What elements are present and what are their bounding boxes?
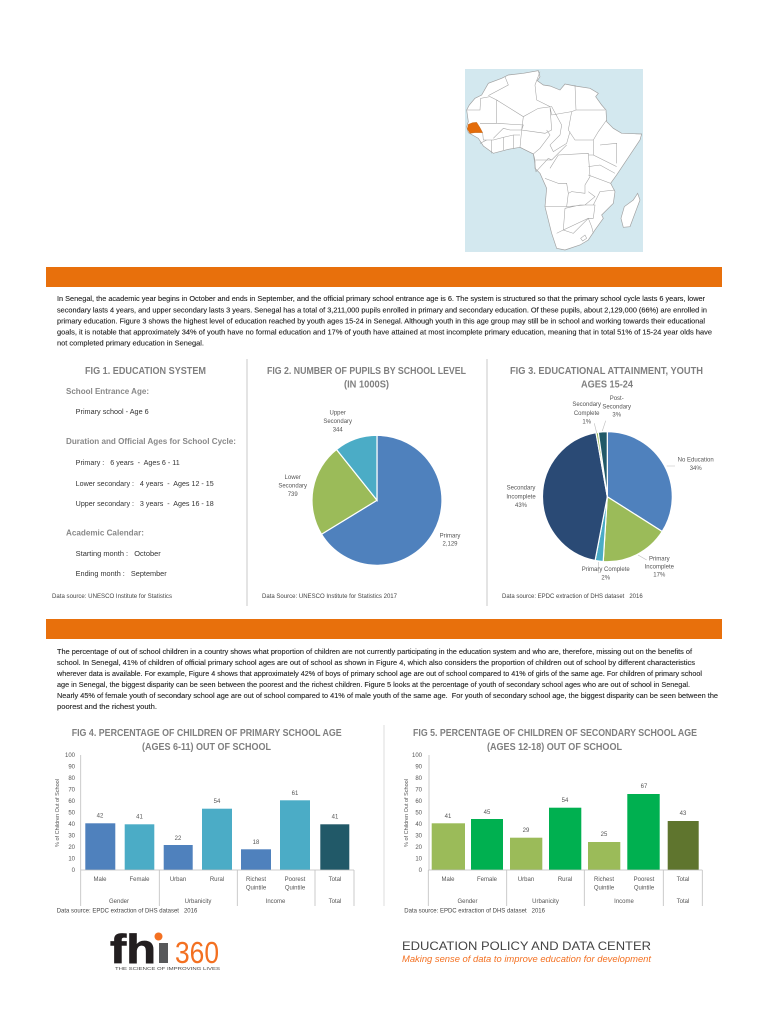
- y axis labels: 0: [72, 868, 76, 874]
- logo: fhi360: 360: [175, 935, 219, 970]
- category labels: Income: [614, 899, 634, 905]
- value labels: 41: [445, 814, 452, 820]
- paragraph: education system intro: goals, it is notable that approximately 34% of youth have no formal education and 17% of youth have attained at most incomplete primary education, meaning that in total 51% of 15-24 year olds have: [57, 330, 712, 336]
- y axis labels: 90: [68, 764, 76, 770]
- pie labels: Secondary: [507, 486, 535, 492]
- value labels: 45: [484, 810, 491, 816]
- ending month: Ending month : September: [76, 571, 167, 578]
- value labels: 18: [253, 840, 260, 846]
- axes and group separators: [428, 755, 702, 906]
- bars: [432, 794, 699, 870]
- subheading: academic calendar: Academic Calendar:: [66, 528, 144, 538]
- category labels: Total: [677, 877, 689, 883]
- heading: Fig 2: FIG 2. NUMBER OF PUPILS BY SCHOOL LEVEL: [267, 366, 466, 377]
- y axis labels: 80: [415, 776, 423, 782]
- category labels: Quintile: [246, 886, 267, 892]
- category labels: [93, 877, 341, 905]
- category labels: Urban: [518, 877, 534, 883]
- upper secondary cycle: Upper secondary : 3 years - Ages 16 - 18: [76, 501, 214, 508]
- value labels: 61: [292, 791, 299, 797]
- value labels: [97, 791, 339, 846]
- pie labels: 2%: [601, 576, 611, 582]
- paragraph: out of school intro: Nearly 45% of female youth of secondary school age are out of school compared to 41% of male youth of the same age. For youth of secondary school age, the biggest disparity can be seen between the: [57, 693, 718, 700]
- pie labels: 3%: [612, 413, 622, 419]
- y axis labels: 50: [415, 810, 423, 816]
- y axis labels: 60: [415, 799, 423, 805]
- map: Africa with Senegal highlighted: [465, 69, 643, 252]
- pie labels: Primary: [649, 556, 670, 562]
- pie labels: Secondary: [572, 402, 601, 408]
- heading: Fig 5: FIG 5. PERCENTAGE OF CHILDREN OF SECONDARY SCHOOL AGE: [413, 728, 697, 739]
- y axis labels: [65, 753, 76, 874]
- value labels: 54: [214, 799, 221, 805]
- heading: Fig 3: AGES 15-24: [581, 380, 633, 390]
- value labels: 25: [601, 832, 608, 838]
- panel: Fig 4 bar chart: [55, 728, 354, 914]
- pie labels: Complete: [574, 411, 600, 417]
- category labels: Quintile: [594, 886, 615, 892]
- y axis labels: [412, 753, 423, 874]
- panel: Fig 1 education system: [52, 366, 236, 600]
- y axis labels: 20: [68, 845, 76, 851]
- pie labels: Incomplete: [506, 494, 536, 500]
- pie labels: Secondary: [278, 484, 307, 490]
- y axis labels: 70: [415, 788, 423, 794]
- pie labels: Primary Complete: [582, 567, 630, 573]
- category labels: Rural: [210, 877, 224, 883]
- category labels: Gender: [109, 899, 129, 905]
- category labels: [441, 877, 689, 905]
- category labels: Urban: [170, 877, 186, 883]
- value labels: 29: [523, 828, 530, 834]
- paragraph: out of school intro: age in Senegal, the biggest disparity can be seen between the poorest and the richest children. Figure 5 looks at the percentage of youth of secondary school ages who are out of school in Senegal.: [57, 682, 690, 689]
- paragraph: education system intro: primary education. Figure 3 shows the highest level of education reached by youth ages 15-24 in Senegal. Although youth in this age group may still be in school and working towards their educational: [57, 318, 705, 326]
- category labels: Poorest: [634, 877, 655, 883]
- value labels: 42: [97, 814, 104, 820]
- heading: Fig 4: [72, 728, 342, 753]
- paragraph: out of school intro: school. In Senegal, 41% of children of official primary school ages are out of school as shown in Figure 4, which also considers the proportion of children out of school by different characteristics: [57, 660, 696, 667]
- category labels: Total: [329, 877, 341, 883]
- category labels: Rural: [558, 877, 572, 883]
- y axis labels: 20: [415, 845, 423, 851]
- section banner 2: [46, 619, 722, 639]
- paragraph: out of school intro: The percentage of out of school children in a country shows what proportion of children are not currently participating in the education system and who are, therefore, missing out on the benefits of: [57, 649, 692, 656]
- pie labels: [278, 410, 460, 548]
- y axis labels: 30: [415, 834, 423, 840]
- primary cycle: Primary : 6 years - Ages 6 - 11: [76, 460, 180, 467]
- logo: Education Policy and Data Center: Making sense of data to improve education for development: [402, 954, 652, 964]
- category labels: Quintile: [285, 886, 306, 892]
- category labels: Richest: [246, 877, 266, 883]
- pie labels: [506, 396, 714, 582]
- category labels: Total: [677, 899, 689, 905]
- panel: Fig 5 bar chart: [404, 728, 702, 914]
- y axis labels: 40: [415, 822, 423, 828]
- logo: Education Policy and Data Center: EDUCATION POLICY AND DATA CENTER: [402, 941, 651, 953]
- pie labels: 17%: [653, 573, 666, 579]
- paragraph: education system intro: In Senegal, the academic year begins in October and ends in September, and the official primary school entrance age is 6. The system is structured so that the primary school cycle lasts 6 years, lower: [57, 296, 706, 303]
- pie labels: 1%: [582, 419, 592, 425]
- starting month: Starting month : October: [76, 551, 161, 558]
- entrance age value: Primary school - Age 6: [76, 409, 149, 416]
- paragraph: out of school intro: wherever data is available. For example, Figure 4 shows that approximately 42% of boys of primary school age are out of school compared to 41% of girls of the same age. For children of primary school: [56, 671, 702, 678]
- category labels: Gender: [457, 899, 478, 905]
- category labels: Poorest: [285, 877, 306, 883]
- y axis labels: 40: [68, 822, 76, 828]
- y axis labels: 90: [415, 764, 423, 770]
- y axis labels: 60: [68, 799, 76, 805]
- value labels: 41: [136, 814, 143, 820]
- paragraph: out of school intro: [56, 649, 718, 711]
- value labels: 67: [641, 784, 648, 790]
- category labels: Richest: [594, 877, 614, 883]
- category labels: Female: [477, 877, 498, 883]
- y axis labels: 50: [68, 810, 76, 816]
- y axis labels: 10: [68, 856, 76, 862]
- pie labels: 2,129: [442, 542, 458, 548]
- heading: Fig 2: [267, 366, 466, 390]
- pie labels: No Education: [678, 458, 714, 464]
- leader lines: [594, 421, 675, 573]
- pie: pupils by level: [312, 435, 442, 565]
- heading: Fig 3: [510, 366, 703, 390]
- value labels: 54: [562, 798, 569, 804]
- subheading: duration: Duration and Official Ages for School Cycle:: [66, 436, 236, 446]
- data source: Data source: UNESCO Institute for Statistics: [52, 594, 172, 600]
- pie labels: Post-: [610, 396, 624, 402]
- data source: Data source: EPDC extraction of DHS dataset 2016: [404, 908, 546, 914]
- data source: Data source: EPDC extraction of DHS dataset 2016: [57, 908, 198, 914]
- value labels: 22: [175, 836, 182, 842]
- pie labels: Primary: [440, 534, 460, 540]
- y axis labels: 10: [415, 856, 423, 862]
- value labels: 43: [680, 811, 687, 817]
- lower secondary cycle: Lower secondary : 4 years - Ages 12 - 15: [76, 481, 214, 488]
- pie labels: 344: [333, 428, 343, 434]
- panel: Fig 3 pie chart: [502, 366, 714, 600]
- paragraph: out of school intro: poorest and the richest youth.: [57, 704, 157, 711]
- pie labels: Upper: [330, 410, 346, 416]
- category labels: Urbanicity: [185, 899, 211, 905]
- paragraph: education system intro: secondary lasts 4 years, and upper secondary lasts 3 years. Senegal has a total of 3,211,000 pupils enrolled in primary and secondary education. Of these pupils, about 2,129,000 (66%) are enrolled in: [57, 308, 707, 314]
- axes and group separators: [81, 755, 354, 906]
- pie labels: Incomplete: [645, 565, 675, 571]
- category labels: Male: [93, 877, 107, 883]
- paragraph: education system intro: not completed primary education in Senegal.: [57, 340, 204, 348]
- value labels: [445, 784, 687, 838]
- pie labels: 739: [288, 492, 298, 498]
- data source: Data source: EPDC extraction of DHS dataset 2016: [502, 594, 643, 600]
- bars: [85, 800, 349, 870]
- y axis labels: 80: [68, 776, 76, 782]
- y axis title: % of Children Out of School: [55, 779, 61, 847]
- subheading: school entrance age: School Entrance Age:: [66, 386, 149, 396]
- y axis labels: 0: [419, 868, 423, 874]
- pie: attainment: [542, 432, 672, 562]
- heading: Fig 4: (AGES 6-11) OUT OF SCHOOL: [142, 742, 271, 753]
- logo: fhi360: THE SCIENCE OF IMPROVING LIVES: [115, 966, 220, 971]
- logo: fhi360: fh: [110, 926, 156, 972]
- heading: Fig 2: (IN 1000S): [344, 380, 389, 390]
- y axis title: % of Children Out of School: [404, 779, 410, 847]
- category labels: Male: [441, 877, 455, 883]
- pie labels: 34%: [690, 466, 702, 472]
- category labels: Urbanicity: [532, 899, 559, 905]
- pie labels: Secondary: [602, 404, 631, 410]
- logo: fhi360: [110, 926, 220, 972]
- heading: Fig 5: [413, 728, 697, 753]
- data source: Data Source: UNESCO Institute for Statistics 2017: [262, 594, 398, 600]
- heading: Fig 1: FIG 1. EDUCATION SYSTEM: [85, 366, 206, 377]
- pie labels: Lower: [285, 475, 301, 481]
- category labels: Total: [329, 899, 341, 905]
- logo: Education Policy and Data Center: [402, 941, 652, 964]
- y axis labels: 100: [65, 753, 76, 759]
- y axis labels: 70: [68, 788, 76, 794]
- y axis labels: 100: [412, 753, 423, 759]
- value labels: 41: [332, 814, 339, 820]
- category labels: Quintile: [634, 886, 655, 892]
- heading: Fig 5: (AGES 12-18) OUT OF SCHOOL: [487, 742, 622, 753]
- heading: Fig 3: FIG 3. EDUCATIONAL ATTAINMENT, YOUTH: [510, 366, 703, 377]
- panel: Fig 2 pie chart: [262, 366, 466, 600]
- category labels: Female: [129, 877, 150, 883]
- section banner 1: [46, 267, 722, 287]
- pie labels: Secondary: [323, 419, 352, 425]
- pie labels: 43%: [515, 503, 528, 509]
- heading: Fig 4: FIG 4. PERCENTAGE OF CHILDREN OF PRIMARY SCHOOL AGE: [72, 728, 342, 739]
- y axis labels: 30: [68, 834, 76, 840]
- category labels: Income: [266, 899, 286, 905]
- paragraph: education system intro: [57, 296, 712, 348]
